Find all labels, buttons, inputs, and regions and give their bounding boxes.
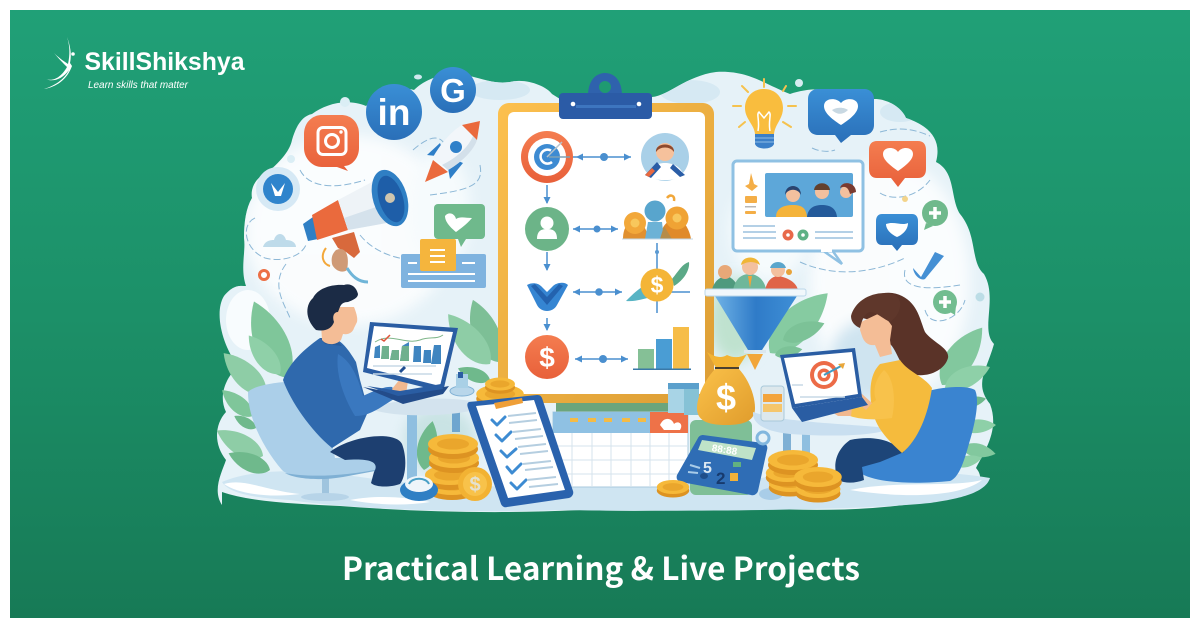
icon: rocket	[425, 121, 480, 182]
icon: leaping figure	[44, 37, 75, 89]
man's chair	[248, 381, 391, 501]
woman torso	[870, 360, 932, 453]
right laptop	[780, 348, 868, 422]
flow connectors	[544, 153, 631, 363]
bar chart	[633, 327, 691, 370]
icon: orange dollar	[525, 335, 569, 379]
icon: light bulb	[733, 79, 796, 148]
logo tagline: Learn skills that matter	[88, 80, 189, 91]
check marks	[492, 417, 526, 489]
icon: blue chevron funnel	[527, 283, 568, 311]
clipboard paper	[508, 112, 705, 394]
woman hair back	[855, 293, 948, 375]
gauge device	[400, 476, 438, 501]
icon: orange dollar: $	[539, 342, 555, 373]
coin stack right	[766, 450, 842, 502]
icon: small blue badge	[256, 167, 300, 211]
calculator: 2	[716, 469, 725, 488]
screen target	[810, 361, 845, 389]
icon: google badge: G	[440, 72, 466, 109]
icon: linkedin badge	[366, 84, 422, 140]
blue chair	[859, 387, 977, 483]
man torso and arm	[283, 338, 396, 448]
right table	[753, 412, 890, 462]
icon: linkedin badge: in	[378, 92, 410, 133]
calculator: 5	[703, 460, 712, 477]
icon: google badge	[430, 67, 476, 113]
logo	[44, 37, 246, 91]
coins on table	[476, 378, 524, 408]
funnel cone	[715, 296, 797, 350]
icon: cloud	[263, 234, 296, 247]
people in funnel	[712, 258, 798, 290]
glass jar	[761, 386, 784, 421]
clipboard clip	[494, 398, 523, 409]
man trousers	[330, 436, 405, 486]
icon: megaphone	[303, 165, 415, 282]
coin stack left	[425, 434, 492, 501]
leaf under left table	[414, 419, 442, 472]
woman hand	[829, 404, 852, 416]
strip behind calendar	[556, 400, 696, 414]
man hair	[307, 284, 358, 331]
funnel spout	[744, 350, 766, 353]
icon: green user	[525, 207, 569, 251]
icon: green chat card	[434, 204, 485, 247]
calculator	[677, 432, 769, 495]
desk jar	[450, 372, 474, 396]
card side icons	[745, 173, 758, 214]
small coin	[657, 480, 689, 498]
icon: blue check	[913, 252, 944, 279]
checklist clipboard	[467, 395, 573, 507]
icon: dollar coin with brush: $	[651, 272, 664, 298]
icon: blue small bubble	[876, 214, 918, 251]
icon: target	[521, 131, 573, 183]
icon: dollar coin with brush	[626, 243, 690, 313]
leaves right of man	[438, 295, 510, 387]
clipboard clip	[559, 73, 652, 119]
dashed connector lines	[246, 129, 965, 321]
title: Practical Learning & Live Projects	[342, 544, 860, 590]
decorative dot	[902, 196, 908, 202]
icon: small orange ring	[260, 270, 268, 280]
leaves behind woman	[930, 319, 997, 470]
woman	[829, 293, 948, 483]
man hand	[392, 379, 408, 397]
small blue gadget	[759, 488, 783, 500]
funnel with people	[705, 258, 806, 370]
icon: green plus bubble	[922, 200, 948, 230]
illustration backdrop cloud	[217, 72, 994, 512]
icon: person avatar	[641, 133, 689, 181]
money bag	[697, 352, 755, 425]
icon: orange heart bubble	[869, 141, 926, 187]
bottles	[668, 383, 699, 415]
icon: instagram bubble	[304, 115, 359, 171]
woman arm	[850, 370, 894, 419]
funnel rim	[705, 289, 806, 296]
presentation card	[733, 161, 863, 264]
ground band	[222, 470, 990, 511]
logo wordmark: SkillShikshya	[84, 48, 246, 76]
left table	[373, 399, 477, 482]
icon: audience group	[622, 196, 693, 239]
man head	[321, 307, 357, 344]
clipboard frame	[498, 103, 714, 403]
clipboard	[498, 73, 714, 403]
woman fringe	[851, 293, 900, 328]
green plinth under bag	[690, 420, 752, 495]
woman trousers	[835, 438, 904, 483]
big coin: $	[469, 474, 481, 496]
money bag: $	[716, 377, 736, 418]
card lines and buttons	[743, 226, 853, 240]
woman face	[860, 312, 892, 357]
left laptop	[363, 322, 458, 404]
icon: green plus bubble lower	[933, 290, 957, 315]
checklist lines	[508, 413, 558, 487]
man	[283, 284, 408, 486]
video photo	[765, 173, 856, 217]
calendar	[553, 412, 688, 487]
icon: document card	[401, 239, 486, 288]
leaves behind man	[211, 295, 302, 479]
leaves beside funnel	[757, 281, 839, 364]
calculator: 88:88	[711, 443, 738, 458]
icon: blue heart bubble	[808, 89, 874, 143]
